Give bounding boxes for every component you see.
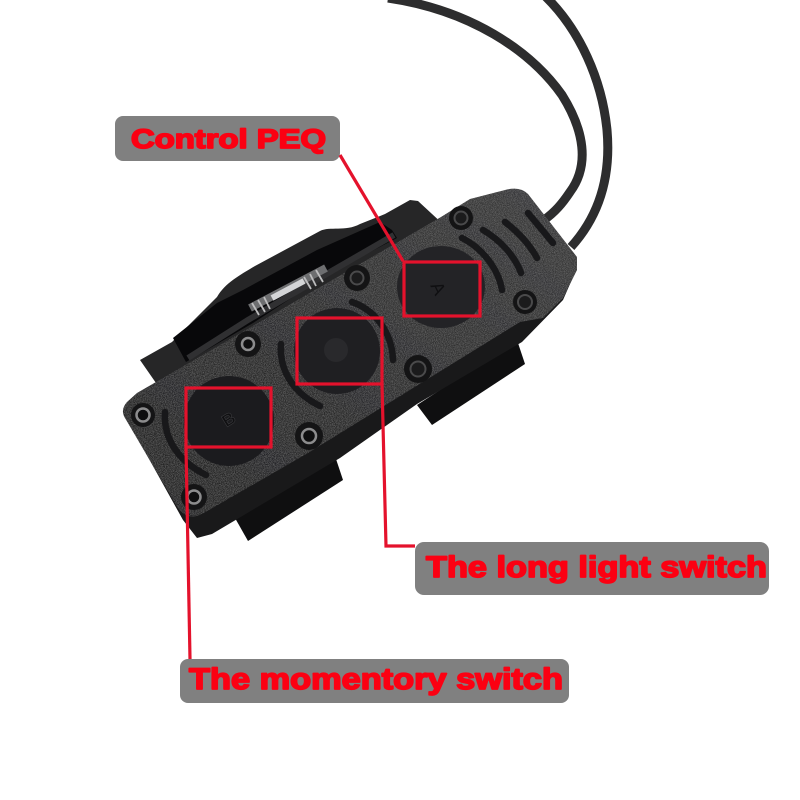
button: B: B: [218, 408, 239, 431]
front plate: [123, 189, 577, 517]
highlight box and leader: momentory switch: [186, 388, 271, 659]
button: centre: [294, 308, 380, 394]
callout: The momentory switch: The momentory switch: [189, 663, 563, 696]
callout: The momentory switch: [180, 659, 569, 703]
cables: [388, 0, 608, 247]
rear rail mount: [140, 200, 445, 383]
slot with spring latch: [173, 222, 397, 362]
bottom rail clamps: [235, 340, 525, 541]
grooves: [165, 213, 553, 475]
buttons: [184, 246, 485, 466]
device body: [123, 189, 577, 541]
button: A: [397, 246, 485, 328]
highlight box and leader: Control PEQ: [340, 155, 480, 316]
callout: Control PEQ: [115, 116, 340, 161]
button: A: A: [426, 279, 450, 298]
callout: The long light switch: [415, 542, 769, 595]
side wall: [124, 268, 577, 538]
callout: The long light switch: The long light switch: [426, 551, 767, 584]
button: B: [184, 376, 274, 466]
callout: Control PEQ: Control PEQ: [131, 124, 326, 154]
highlight box and leader: long light switch: [297, 318, 415, 546]
screw recesses: [131, 206, 537, 510]
screws: [136, 338, 316, 504]
